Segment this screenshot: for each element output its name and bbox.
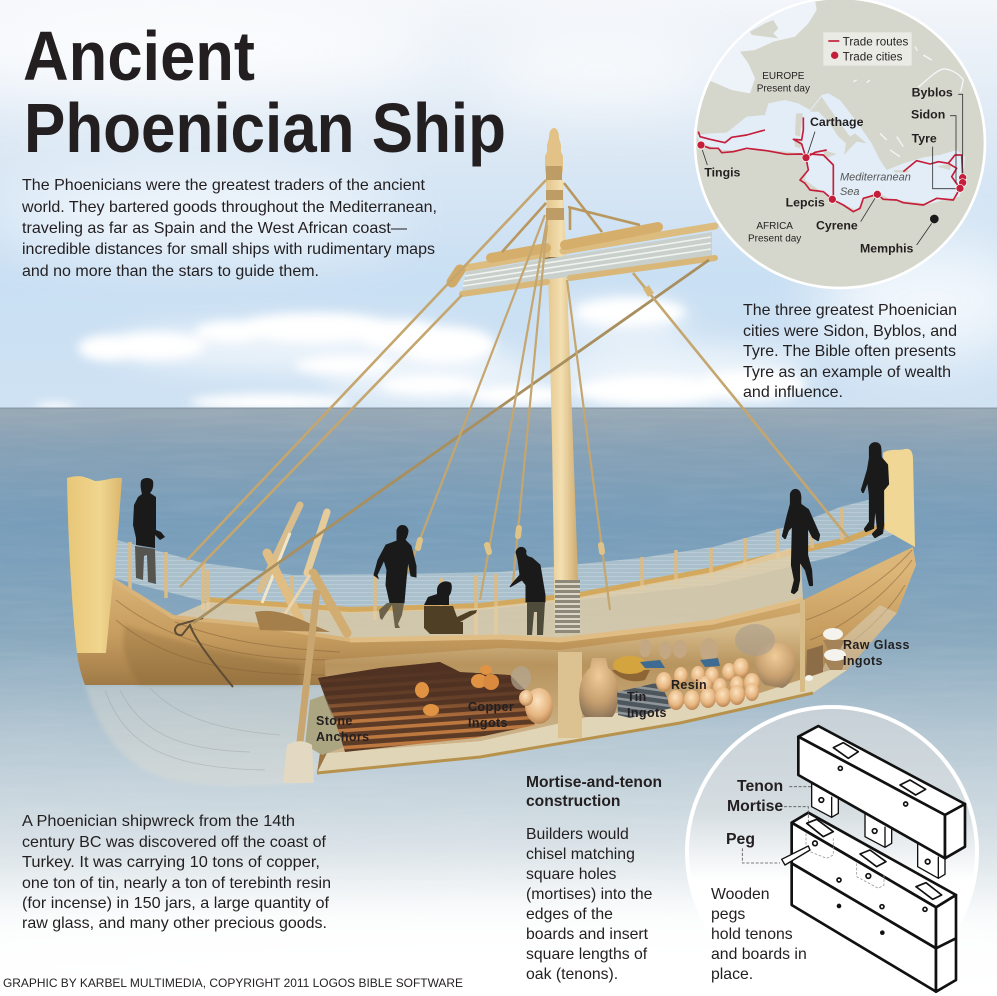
diagram caption: Wooden [711,886,770,903]
mortise text [526,826,653,983]
mortise heading [526,774,662,810]
stone anchors [305,690,350,755]
title: Ancient [23,17,255,95]
intro text: The Phoenicians were the greatest traders of the ancient [22,177,426,194]
hold labels: Ingots [468,716,508,730]
hold labels: Anchors [316,730,370,744]
mortise text: oak (tenons). [526,966,618,983]
diagram caption [711,886,807,983]
clouds [0,0,997,411]
shipwreck text: raw glass, and many other precious goods. [22,915,327,932]
map labels: Lepcis [786,196,825,210]
figure at bow [862,443,888,537]
credit line: GRAPHIC BY KARBEL MULTIMEDIA, COPYRIGHT 2011 LOGOS BIBLE SOFTWARE [3,976,463,990]
resin jars [656,658,760,710]
hold labels: Ingots [627,706,667,720]
map circle [695,0,985,288]
shipwreck text: (for incense) in 150 jars, a large quantity of [22,895,330,912]
inset circle [687,707,977,996]
raw glass ingots [805,628,846,681]
mortise heading: construction [526,793,620,810]
map labels [704,86,953,256]
hull floor [317,670,847,773]
region labels: AFRICA [756,221,793,232]
mortise text: Builders would [526,826,629,843]
region labels: Present day [757,83,810,94]
tin ingots [617,682,672,718]
map labels: Byblos [912,86,953,100]
cities text: Tyre as an example of wealth [743,364,951,381]
legend [823,32,912,66]
jars by copper [511,666,553,724]
region labels: Present day [748,234,801,245]
far side netting and posts [113,490,905,640]
mortise text: edges of the [526,906,613,923]
map labels: Tingis [704,166,741,180]
hull upper and left body [77,547,916,773]
mortise text: boards and insert [526,926,649,943]
diagram labels [726,778,783,848]
trade cities [697,141,967,203]
intro text: and no more than the stars to guide them. [22,263,319,280]
underwater ghost hull [85,685,340,786]
hold labels: Raw Glass [843,638,910,652]
diagram labels: Mortise [727,798,783,815]
hold labels: Stone [316,714,353,728]
diagram caption: place. [711,966,753,983]
crew silhouettes [133,443,888,635]
sea label: Mediterranean [840,171,911,183]
figure leaning [510,547,545,635]
copper ingot stacks [318,662,535,752]
Memphis marker [930,215,939,223]
bow anchor rope [175,618,233,687]
hull bow fade [815,605,897,690]
cities text: Tyre. The Bible often presents [743,343,956,360]
diagram caption: and boards in [711,946,807,963]
diagram caption: hold tenons [711,926,793,943]
map labels: Sidon [911,108,945,122]
diagram caption: pegs [711,906,745,923]
tenons [812,783,945,878]
seas [690,0,965,210]
sky background [0,0,997,410]
mortise heading: Mortise-and-tenon [526,774,662,791]
leader lines [702,94,963,245]
map inset [690,0,985,288]
seated figure [424,581,477,634]
diagram labels: Tenon [737,778,783,795]
bulkhead post [558,652,582,738]
black sea and coast marks [853,47,963,157]
hold labels: Ingots [843,654,883,668]
mortise text: square holes [526,866,617,883]
shipwreck text: one ton of tin, nearly a ton of terebinth resin [22,875,331,892]
hull planking lines [116,550,912,675]
upper board [798,726,965,858]
mortise and tenon inset [687,707,977,996]
land masses over the sea [750,20,952,173]
title [23,17,506,167]
joint diagram [742,726,965,992]
near side deck structure [173,545,803,640]
mast [545,128,580,633]
cities text [743,302,957,401]
intro text: world. They bartered goods throughout the Mediterranean, [21,199,437,216]
bow post [883,449,915,547]
intro text: incredible distances for small ships with rudimentary maps [22,241,435,258]
legend: Trade cities [843,51,903,64]
mortise text: (mortises) into the [526,886,653,903]
cities text: and influence. [743,384,843,401]
shipwreck text: A Phoenician shipwreck from the 14th [22,813,295,830]
title: Phoenician Ship [24,89,506,167]
sea label [840,171,911,198]
shipwreck text: century BC was discovered off the coast of [22,834,327,851]
cities text: cities were Sidon, Byblos, and [743,323,957,340]
cities text: The three greatest Phoenician [743,302,957,319]
shipwreck text: Turkey. It was carrying 10 tons of copper, [22,854,320,871]
map labels: Carthage [810,115,864,129]
region labels [748,71,810,245]
hull shadow below gunwale [123,625,300,685]
diagram labels: Peg [726,831,755,848]
map labels: Tyre [912,131,937,145]
stern post [67,476,122,653]
shipwreck text [22,813,331,932]
hold labels: Copper [468,700,514,714]
walking figure [374,526,416,628]
map labels: Cyrene [816,218,858,232]
figure on foredeck [783,490,819,593]
intro text [21,177,437,280]
yard and folded sail [452,226,715,294]
hidden tenon lines [806,833,884,888]
hold labels: Resin [671,678,707,692]
mortise text: chisel matching [526,846,635,863]
hold labels: Tin [627,690,647,704]
peg [782,846,810,865]
trade routes [698,117,963,212]
rigging ropes [180,180,850,623]
map labels: Memphis [860,242,914,256]
region labels: EUROPE [762,71,805,82]
steering oar and spars [255,505,347,783]
hold cutaway interior [325,612,803,753]
hold labels [316,638,910,744]
figure at stern [133,478,165,584]
callout lines [742,787,812,863]
legend: Trade routes [843,35,908,48]
intro text: traveling as far as Spain and the West African coast— [22,220,407,237]
forward bulkhead [800,600,805,692]
mortise text: square lengths of [526,946,648,963]
sea label: Sea [840,186,860,198]
large jars and bowls [579,624,796,717]
lower boards [792,813,956,992]
sea [0,408,997,996]
